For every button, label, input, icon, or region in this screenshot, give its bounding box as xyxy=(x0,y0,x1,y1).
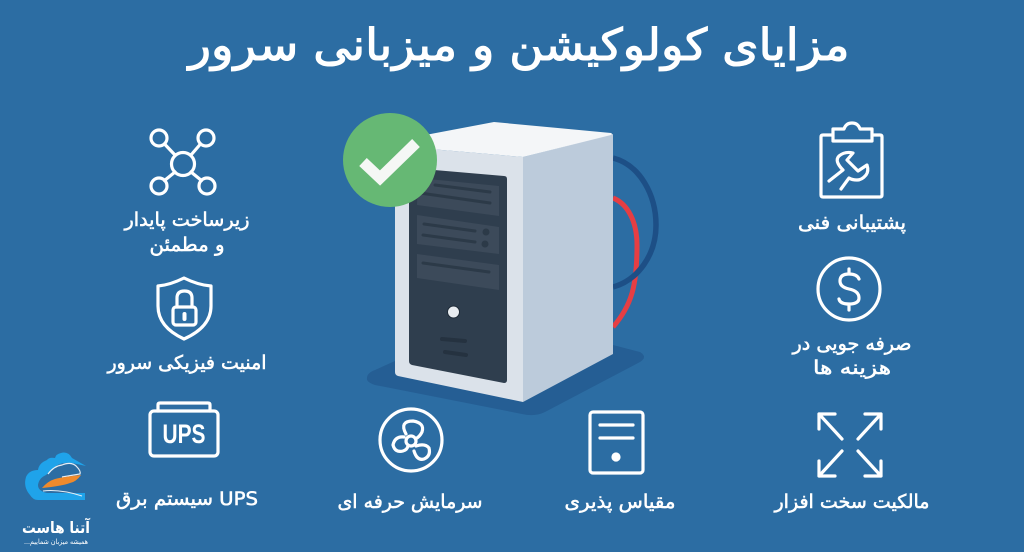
blue cable xyxy=(613,158,656,287)
item: professional cooling xyxy=(338,409,482,513)
server top face xyxy=(395,122,612,157)
item: technical support xyxy=(798,123,906,234)
label: امنیت فیزیکی سرور xyxy=(107,352,266,374)
tagline: همیشه میزبان شماییم... xyxy=(24,538,88,546)
logo xyxy=(22,453,90,546)
item: cost savings xyxy=(791,258,912,379)
icon: clipboard with wrench xyxy=(821,123,882,197)
red cable xyxy=(613,198,637,327)
green check badge xyxy=(343,113,437,207)
icon: fan xyxy=(380,409,442,471)
brand name: آتنا هاست xyxy=(22,517,90,537)
vents xyxy=(442,339,466,355)
label: پشتیبانی فنی xyxy=(798,212,906,234)
icon: UPS box xyxy=(150,403,218,456)
icon: dollar circle xyxy=(818,258,880,320)
drive bay 2 xyxy=(417,215,499,254)
drive bay 1 xyxy=(417,178,499,216)
label: زیرساخت پایدار xyxy=(123,209,250,231)
title: مزایای کولوکیشن و میزبانی سرور xyxy=(186,20,850,71)
label: مالکیت سخت افزار xyxy=(773,491,930,513)
icon: shield with lock xyxy=(158,278,211,339)
label: UPS سیستم برق xyxy=(116,488,258,510)
item: hardware ownership xyxy=(773,414,930,513)
label: صرفه جویی در xyxy=(791,333,912,355)
power button xyxy=(448,306,460,318)
label: سرمایش حرفه ای xyxy=(338,491,482,513)
item: UPS power xyxy=(116,403,258,510)
icon: network nodes xyxy=(151,130,215,194)
icon: expand arrows xyxy=(819,414,881,476)
label line 2: و مطمئن xyxy=(150,234,224,256)
icon: UPS box: UPS xyxy=(162,419,206,449)
label line 2: هزینه ها xyxy=(813,357,891,379)
server floor shadow xyxy=(367,345,644,415)
server illustration xyxy=(343,113,656,415)
label: مقیاس پذیری xyxy=(564,491,676,513)
front panel xyxy=(409,168,507,383)
item: network infrastructure xyxy=(123,130,250,256)
server front face xyxy=(395,146,523,402)
icon: cloud logo xyxy=(25,453,86,500)
icon: server tower xyxy=(590,412,643,473)
drive bay 3 xyxy=(417,254,499,290)
item: physical security xyxy=(107,278,266,374)
item: scalability xyxy=(564,412,676,513)
server side face xyxy=(523,134,613,402)
